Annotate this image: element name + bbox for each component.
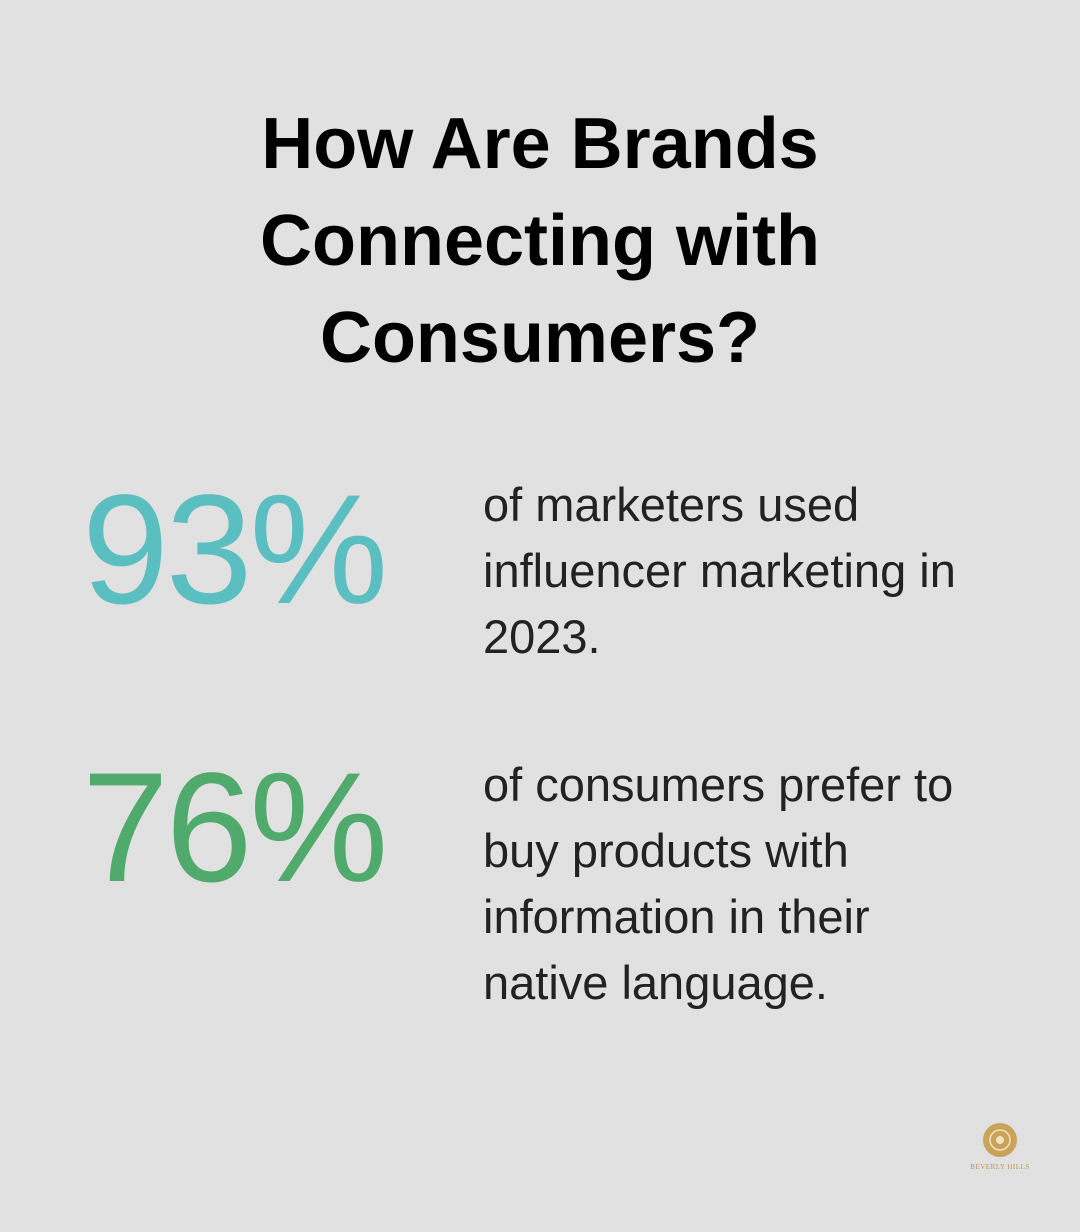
logo: Beverly Hills (970, 1123, 1030, 1171)
text: stat 1 description (483, 478, 956, 663)
title: Consumers? (320, 298, 760, 378)
text: stat 1 description: of marketers used (483, 478, 859, 531)
title: Connecting with (260, 201, 820, 281)
text: stat 1 description: 2023. (483, 610, 601, 663)
stat: 93%: 93% (82, 463, 385, 637)
text: stat 2 description (483, 758, 953, 1009)
text: stat 2 description: native language. (483, 956, 828, 1009)
text: stat 2 description: buy products with (483, 824, 849, 877)
logo: Beverly Hills: BEVERLY HILLS (970, 1163, 1030, 1171)
text: stat 1 description: influencer marketing in (483, 544, 956, 597)
text: stat 2 description: information in their (483, 890, 870, 943)
title: How Are Brands (261, 104, 819, 184)
stat: 76%: 76% (82, 741, 385, 915)
title (260, 104, 820, 378)
text: stat 2 description: of consumers prefer to (483, 758, 953, 811)
